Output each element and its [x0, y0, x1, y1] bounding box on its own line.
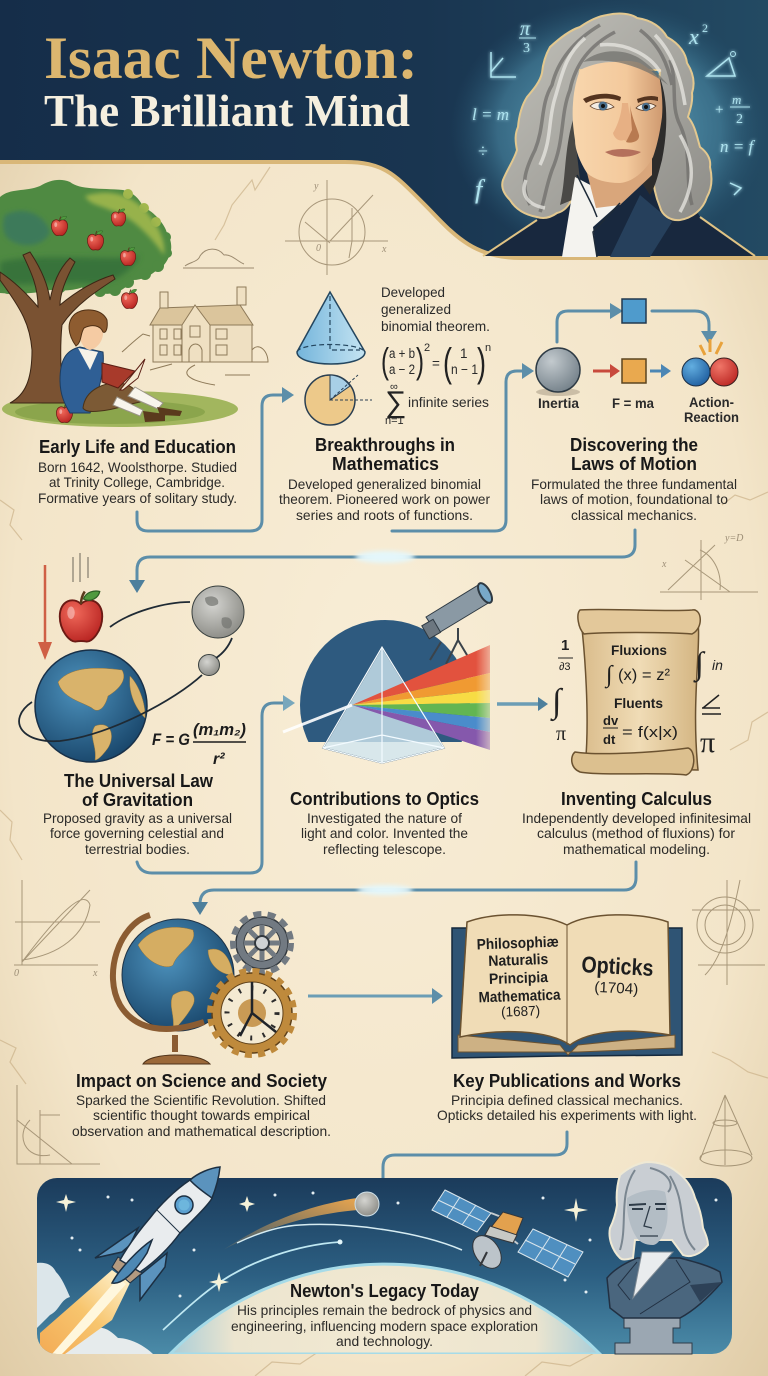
pedestal: [615, 1318, 692, 1354]
heading and text: optics: light and color. Invented the: [301, 825, 468, 841]
illustration: laws of motion: Reaction: [684, 410, 739, 425]
illustration: calculus scroll: 1: [561, 637, 569, 654]
heading and text: optics: Contributions to Optics: [290, 789, 479, 809]
illustration: open book: Principia: [489, 969, 549, 988]
heading and text: legacy: engineering, influencing modern space exploration: [231, 1318, 538, 1334]
arrow: impact to publications: [308, 988, 443, 1004]
binomial theorem notes: Developed: [381, 285, 445, 300]
background sketch: circle diagram: y: [313, 181, 319, 192]
heading and text: gravitation: terrestrial bodies.: [85, 841, 190, 857]
illustration: laws of motion: F = ma: [612, 396, 654, 411]
binomial theorem notes: =: [432, 356, 440, 371]
connector arrow: gravitation to optics: [137, 695, 295, 873]
floating math symbols: 3: [523, 41, 530, 56]
rocket flame: [40, 1270, 130, 1354]
heading and text: calculus: calculus (method of fluxions) for: [537, 825, 735, 841]
wig: [609, 1162, 708, 1260]
illustration: rocket: [95, 1167, 220, 1300]
heading and text: legacy: Newton's Legacy Today: [290, 1281, 479, 1301]
illustration: calculus scroll: in: [712, 657, 723, 673]
binomial theorem notes: ): [416, 340, 424, 381]
illustration: open book: (1704): [594, 979, 639, 998]
heading and text: laws of motion: laws of motion, foundational to: [540, 491, 728, 507]
heading and text: mathematics: [279, 435, 490, 523]
heading and text: calculus: Independently developed infinitesimal: [522, 810, 751, 826]
heading and text: mathematics: Mathematics: [332, 454, 439, 474]
connector arrow: early life to mathematics: [137, 387, 294, 531]
header banner: [0, 0, 768, 258]
face: [627, 1190, 668, 1245]
illustration: prism and telescope: [282, 582, 493, 764]
shadow beside face: [640, 78, 666, 195]
connector arrow: motion to gravitation: [129, 530, 635, 593]
heading and text: gravitation: [43, 771, 232, 857]
illustration: calculus scroll: ∫: [604, 662, 614, 689]
heading and text: optics: reflecting telescope.: [323, 841, 446, 857]
heading and text: mathematics: Developed generalized binomial: [288, 476, 481, 492]
connector arrow: calculus to impact: [192, 862, 636, 915]
panel: legacy today: [37, 1178, 732, 1354]
heading and text: impact: observation and mathematical description.: [72, 1123, 331, 1139]
heading and text: impact: Sparked the Scientific Revolution. Shifted: [76, 1092, 326, 1108]
binomial theorem notes: 1: [460, 346, 468, 361]
binomial theorem notes: generalized: [381, 302, 451, 317]
binomial theorem notes: n: [485, 342, 491, 354]
illustration: open book: Naturalis: [488, 951, 549, 970]
heading and text: publications: Opticks detailed his experiments with light.: [437, 1107, 697, 1123]
heading and text: legacy: His principles remain the bedrock of physics and: [237, 1302, 532, 1318]
floating math symbols: π: [520, 18, 531, 40]
background sketch: left graph: 0: [14, 968, 19, 979]
background sketch: graph upper right: [660, 533, 758, 600]
floating math symbols: l = m: [472, 105, 509, 124]
binomial theorem notes: a − 2: [389, 362, 415, 377]
illustration: laws of motion: Inertia: [538, 396, 579, 411]
illustration: comet: [355, 1192, 379, 1216]
illustration: calculus scroll: Fluxions: [611, 642, 667, 658]
heading and text: legacy: [231, 1281, 538, 1349]
binomial theorem notes: [381, 285, 491, 427]
illustration: calculus scroll: dv: [603, 713, 619, 728]
heading and text: early life: Early Life and Education: [39, 437, 236, 457]
arrow: optics to calculus: [497, 697, 548, 711]
earth horizon: [170, 1264, 600, 1354]
heading and text: legacy: and technology.: [336, 1333, 433, 1349]
heading and text: laws of motion: Discovering the: [570, 435, 698, 455]
illustration: laws of motion: Action-: [689, 395, 734, 410]
heading and text: early life: at Trinity College, Cambridge.: [49, 474, 225, 490]
heading and text: impact: Impact on Science and Society: [76, 1071, 327, 1091]
illustration: calculus scroll: ∫: [693, 645, 706, 683]
illustration: open book: (1687): [501, 1002, 540, 1020]
binomial theorem notes: 2: [424, 342, 430, 354]
apples: [51, 216, 68, 236]
face: [573, 61, 662, 183]
floating math symbols: 2: [702, 21, 708, 35]
connector arrow: publications to legacy: [383, 1132, 567, 1180]
cravat: [633, 1252, 673, 1298]
binomial theorem notes: (: [381, 340, 389, 381]
background sketch: lower right cone: [700, 1095, 752, 1166]
heading and text: mathematics: series and roots of functions.: [296, 507, 473, 523]
background sketch: left graph: [14, 880, 100, 979]
comet tail: [223, 1198, 358, 1250]
heading and text: gravitation: Proposed gravity as a universal: [43, 810, 232, 826]
illustration: globe, gear and clock: [113, 914, 294, 1064]
floating math symbols: +: [715, 102, 723, 118]
illustration: calculus scroll: (x) = z²: [618, 667, 671, 684]
title: The Brilliant Mind: [44, 86, 410, 136]
illustration: gravity: [19, 553, 246, 768]
binomial theorem notes: ∑: [385, 386, 406, 419]
portrait of Newton: [483, 14, 755, 257]
floating math symbols: n = f: [720, 137, 755, 156]
background sketch: graph upper right: y=D: [724, 533, 744, 544]
eyes and brows: [583, 94, 658, 103]
heading and text: mathematics: Breakthroughs in: [315, 435, 455, 455]
background sketch: circle diagram: [285, 180, 388, 275]
heading and text: laws of motion: [531, 435, 737, 523]
illustration: calculus scroll: ∫: [550, 683, 564, 722]
heading and text: publications: [437, 1071, 697, 1123]
heading and text: calculus: Inventing Calculus: [561, 789, 712, 809]
manor house: [122, 287, 268, 385]
illustration: calculus scroll: π: [556, 723, 566, 745]
heading and text: gravitation: of Gravitation: [82, 790, 193, 810]
floating math symbols: x: [688, 24, 699, 49]
heading and text: early life: Born 1642, Woolsthorpe. Studied: [38, 459, 237, 475]
illustration: gravity: F = G: [152, 730, 190, 749]
illustration: laws of motion: [536, 299, 739, 425]
illustration: gravity: r²: [213, 751, 225, 768]
heading and text: calculus: [522, 789, 751, 857]
background sketch: lower left triangle: [17, 1085, 100, 1164]
heading and text: optics: Investigated the nature of: [307, 810, 462, 826]
illustration: open book: Opticks: [581, 951, 654, 981]
background sketch: graph upper right: x: [661, 559, 667, 570]
illustration: open book: [452, 915, 682, 1058]
floating math symbols: [472, 18, 755, 204]
heading and text: impact: scientific thought towards empirical: [93, 1107, 310, 1123]
illustration: calculus scroll: Fluents: [614, 695, 663, 711]
illustration: cone and pie chart: [297, 292, 372, 425]
binomial theorem notes: binomial theorem.: [381, 319, 490, 334]
illustration: calculus scroll: = f(x|x): [622, 724, 678, 741]
title: Isaac Newton:: [44, 25, 418, 91]
heading and text: early life: Formative years of solitary study.: [38, 490, 237, 506]
neck: [585, 150, 652, 208]
floating math symbols: 2: [736, 112, 743, 127]
heading and text: laws of motion: classical mechanics.: [571, 507, 697, 523]
background sketch: circle diagram: x: [381, 244, 387, 255]
heading and text: mathematics: theorem. Pioneered work on power: [279, 491, 490, 507]
illustration: open book: Philosophiæ: [476, 934, 559, 953]
heading and text: optics: [290, 789, 479, 857]
binomial theorem notes: n=1: [385, 415, 404, 427]
illustration: bust of Newton: [607, 1162, 722, 1354]
background sketch: right circle: [692, 880, 765, 985]
illustration: calculus scroll: ∂3: [559, 661, 571, 673]
tree canopy: [0, 180, 172, 297]
wig strands: [525, 25, 692, 212]
coat: [483, 150, 755, 256]
illustration: open book: Mathematica: [478, 987, 561, 1006]
floating math symbols: f: [475, 175, 486, 204]
binomial theorem notes: n − 1: [451, 362, 478, 377]
grass mound: [2, 391, 238, 427]
title: [44, 25, 418, 136]
floating math symbols: m: [732, 92, 741, 107]
tree trunk: [0, 252, 115, 403]
binomial theorem notes: a + b: [389, 346, 415, 361]
mouth: [605, 149, 641, 157]
heading and text: publications: Principia defined classical mechanics.: [451, 1092, 683, 1108]
binomial theorem notes: ∞: [390, 381, 398, 393]
coat: [607, 1258, 722, 1318]
binomial theorem notes: ): [477, 341, 486, 385]
wig: [502, 14, 711, 220]
heading and text: impact: [72, 1071, 331, 1139]
illustration: calculus scroll: π: [700, 726, 715, 759]
cloud sketch: [183, 249, 254, 268]
illustration: calculus scroll: dt: [603, 732, 616, 747]
heading and text: publications: Key Publications and Works: [453, 1071, 681, 1091]
binomial theorem notes: infinite series: [408, 395, 489, 410]
heading and text: gravitation: force governing celestial and: [50, 825, 224, 841]
heading and text: gravitation: The Universal Law: [64, 771, 214, 791]
nose: [613, 103, 638, 141]
heading and text: laws of motion: Laws of Motion: [571, 454, 697, 474]
illustration: calculus scroll: [550, 609, 723, 775]
illustration: satellite: [432, 1190, 583, 1277]
boy: [60, 347, 103, 413]
heading and text: early life: [38, 437, 237, 506]
floating math symbols: ÷: [478, 141, 488, 161]
connector arrow: mathematics to motion: [392, 363, 534, 531]
background sketch: left graph: x: [92, 968, 98, 979]
clouds: [37, 1263, 70, 1328]
illustration: boy reading beneath apple tree: [0, 180, 268, 427]
heading and text: calculus: mathematical modeling.: [563, 841, 710, 857]
stars: [56, 1194, 588, 1292]
binomial theorem notes: (: [443, 341, 452, 385]
heading and text: laws of motion: Formulated the three fundamental: [531, 476, 737, 492]
shirt: [562, 177, 620, 257]
illustration: gravity: (m₁m₂): [193, 720, 246, 739]
background sketch: circle diagram: 0: [316, 243, 321, 254]
